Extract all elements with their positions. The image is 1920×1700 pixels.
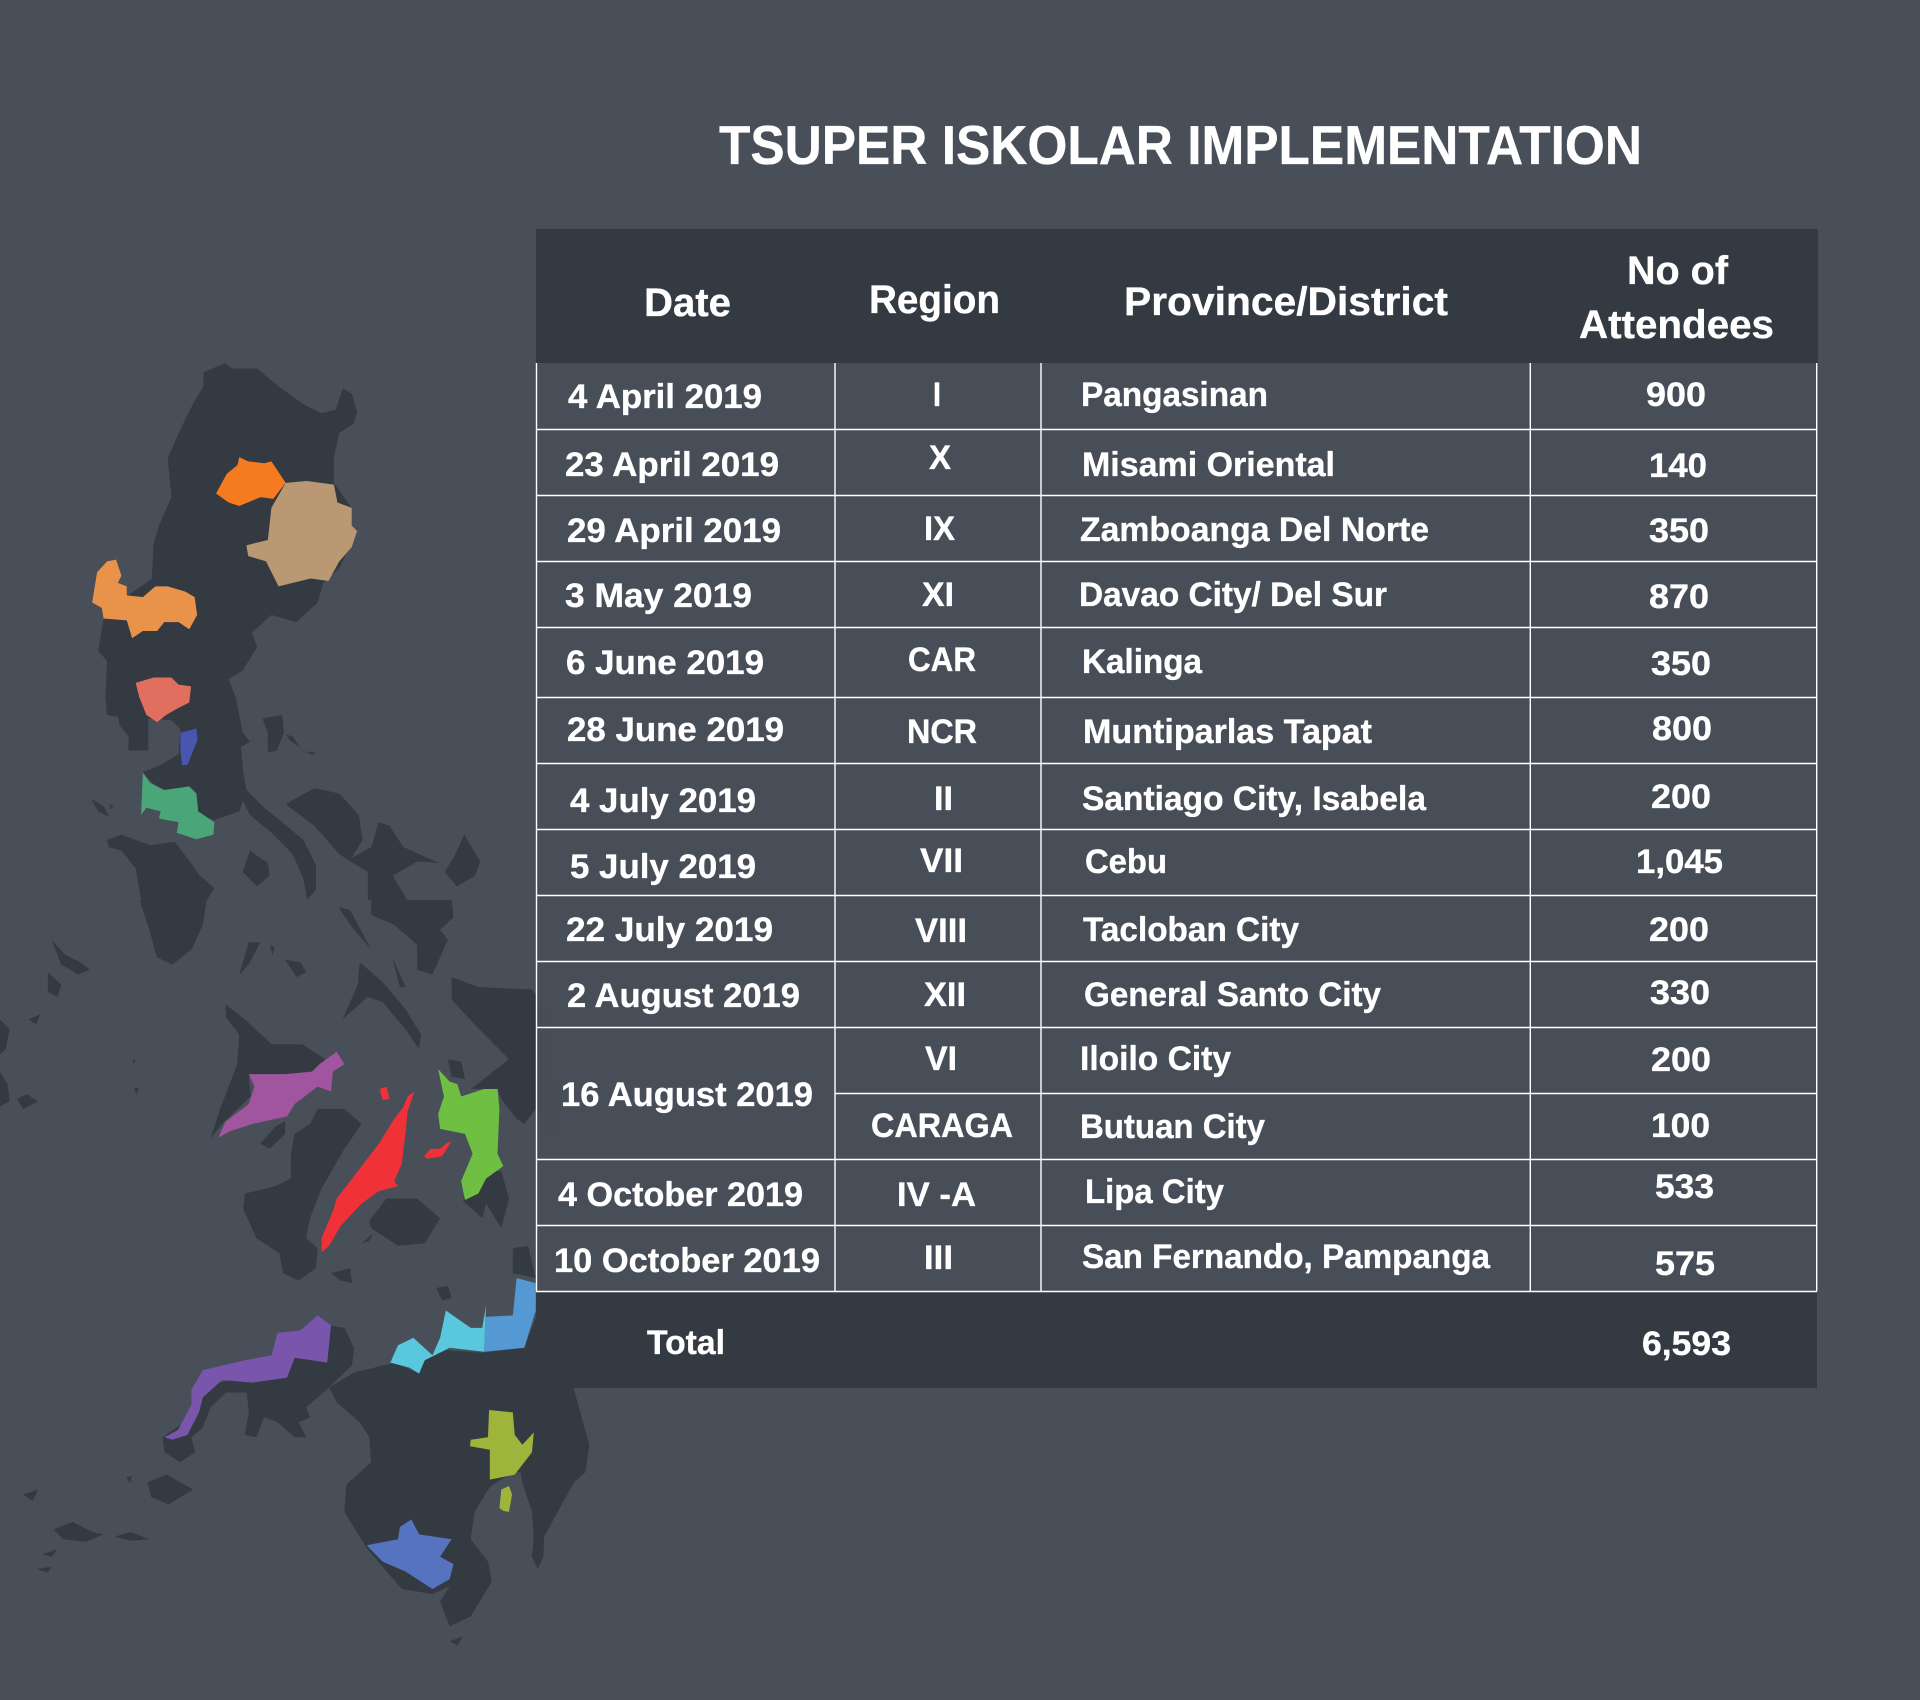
row: 4 July 2019: 4 July 2019 — [570, 782, 756, 820]
map: Luzon landmass and nearby islands — [91, 363, 480, 900]
row: 29 April 2019: 350 — [1649, 512, 1709, 550]
row: 5 July 2019: 5 July 2019 — [570, 848, 756, 886]
row: 6 June 2019: 350 — [1651, 645, 1711, 683]
map region: Kalinga (orange) — [216, 457, 286, 506]
map region: Isabela (tan) — [246, 481, 357, 586]
row: 10 October 2019 — [554, 1238, 1715, 1283]
row: 4 October 2019: 533 — [1655, 1168, 1714, 1206]
row: 2 August 2019 — [567, 974, 1710, 1015]
row: 3 May 2019 — [565, 576, 1709, 616]
row: 4 October 2019: IV -A — [897, 1176, 976, 1214]
row: 22 July 2019 — [566, 911, 1709, 950]
row: 16 August 2019: 16 August 2019 — [561, 1076, 813, 1114]
row: 3 May 2019: 3 May 2019 — [565, 577, 752, 615]
table column headings: Attendees — [1579, 303, 1774, 347]
row: 3 May 2019: XI — [922, 576, 954, 614]
row: 5 July 2019 — [570, 842, 1723, 886]
table column headings: Province/District — [1124, 280, 1448, 324]
row: 29 April 2019: 29 April 2019 — [567, 512, 781, 550]
row: 22 July 2019: Tacloban City — [1083, 911, 1299, 949]
row: 4 April 2019 — [568, 376, 1706, 416]
row: 22 July 2019: VIII — [915, 912, 967, 950]
table column headings: Region — [869, 278, 1000, 322]
row: 28 June 2019: NCR — [907, 713, 977, 751]
row: 28 June 2019: Muntiparlas Tapat — [1083, 713, 1372, 751]
row: 16 August 2019: 200 — [1651, 1041, 1711, 1079]
row: 6 June 2019 — [566, 641, 1711, 683]
row: 4 July 2019: Santiago City, Isabela — [1082, 780, 1427, 818]
row: 23 April 2019: Misami Oriental — [1082, 446, 1335, 484]
row: 4 July 2019: 200 — [1651, 778, 1711, 816]
row: 10 October 2019: III — [924, 1239, 953, 1277]
row: 2 August 2019: 330 — [1650, 974, 1710, 1012]
row: 5 July 2019: Cebu — [1085, 843, 1167, 881]
row: 2 August 2019: XII — [924, 976, 966, 1014]
row: 22 July 2019: 22 July 2019 — [566, 911, 773, 949]
map region: Zamboanga Del Norte (violet) — [165, 1315, 331, 1440]
row: 6 June 2019: Kalinga — [1082, 643, 1203, 681]
row: 4 October 2019 — [558, 1168, 1714, 1214]
map region: Iloilo (purple) — [218, 1052, 344, 1138]
title: TSUPER ISKOLAR IMPLEMENTATION — [719, 114, 1642, 176]
table — [536, 229, 1818, 1388]
row: 28 June 2019 — [567, 710, 1712, 751]
row: 2 August 2019: General Santo City — [1084, 976, 1381, 1014]
row: 22 July 2019: 200 — [1649, 911, 1709, 949]
map region: Cebu (red) — [321, 1087, 452, 1252]
row: 4 October 2019: Lipa City — [1085, 1173, 1224, 1211]
map region: Pangasinan (light orange) — [92, 560, 197, 638]
row: 23 April 2019: 23 April 2019 — [565, 446, 779, 484]
row: 6 June 2019: CAR — [908, 641, 976, 679]
row: 28 June 2019: 28 June 2019 — [567, 711, 784, 749]
row: 28 June 2019: 800 — [1652, 710, 1712, 748]
row: 2 August 2019: 2 August 2019 — [567, 977, 800, 1015]
row: 16 August 2019: Butuan City — [1080, 1108, 1265, 1146]
row: 23 April 2019: 140 — [1649, 447, 1707, 485]
row: 5 July 2019: VII — [920, 842, 963, 880]
row: 10 October 2019: 10 October 2019 — [554, 1242, 820, 1280]
row: total: Total — [647, 1324, 725, 1362]
row: 4 April 2019: 4 April 2019 — [568, 378, 762, 416]
row: 23 April 2019: X — [929, 439, 951, 477]
row: 23 April 2019 — [565, 439, 1707, 485]
row: 16 August 2019 — [561, 1040, 1711, 1146]
row: 4 April 2019: I — [933, 376, 941, 414]
row: total — [647, 1324, 1731, 1363]
row: 4 April 2019: 900 — [1646, 376, 1706, 414]
map region: Pampanga (salmon) — [136, 677, 191, 722]
table column headings: Date — [644, 281, 731, 325]
map region: Davao (yellow-green) — [470, 1410, 534, 1512]
row: 4 April 2019: Pangasinan — [1081, 376, 1268, 414]
row: 10 October 2019: 575 — [1655, 1245, 1715, 1283]
map region: Misamis Oriental (cyan) — [390, 1305, 486, 1374]
map: Visayas and Mindanao landmass — [0, 900, 589, 1645]
row: 4 July 2019: II — [934, 780, 953, 818]
table column headings — [644, 249, 1774, 347]
row: 29 April 2019: IX — [924, 510, 955, 548]
row: 16 August 2019: 100 — [1651, 1107, 1710, 1145]
map region: Batangas (green) — [141, 773, 214, 839]
row: 29 April 2019: Zamboanga Del Norte — [1080, 511, 1429, 549]
row: 16 August 2019: Iloilo City — [1080, 1040, 1231, 1078]
row: 4 July 2019 — [570, 778, 1711, 820]
map of the Philippines — [0, 363, 589, 1645]
map region: General Santos (blue) — [367, 1519, 453, 1589]
map region: Leyte (green) — [438, 1069, 503, 1200]
map region: Butuan (blue) — [484, 1278, 536, 1352]
table body background — [536, 363, 1817, 1291]
table header bar — [536, 229, 1818, 363]
row: 3 May 2019: Davao City/ Del Sur — [1079, 576, 1387, 614]
table column headings: No of — [1627, 249, 1729, 293]
map region: NCR (indigo) — [180, 729, 197, 765]
row: 3 May 2019: 870 — [1649, 578, 1709, 616]
row: 29 April 2019 — [567, 510, 1709, 550]
row: total: 6,593 — [1642, 1325, 1731, 1363]
row: 4 October 2019: 4 October 2019 — [558, 1176, 803, 1214]
row: 5 July 2019: 1,045 — [1636, 843, 1723, 881]
row: 10 October 2019: San Fernando, Pampanga — [1082, 1238, 1491, 1276]
row: 16 August 2019: CARAGA — [871, 1107, 1013, 1145]
row: 6 June 2019: 6 June 2019 — [566, 644, 764, 682]
table total bar — [536, 1291, 1817, 1388]
row: 16 August 2019: VI — [925, 1040, 957, 1078]
